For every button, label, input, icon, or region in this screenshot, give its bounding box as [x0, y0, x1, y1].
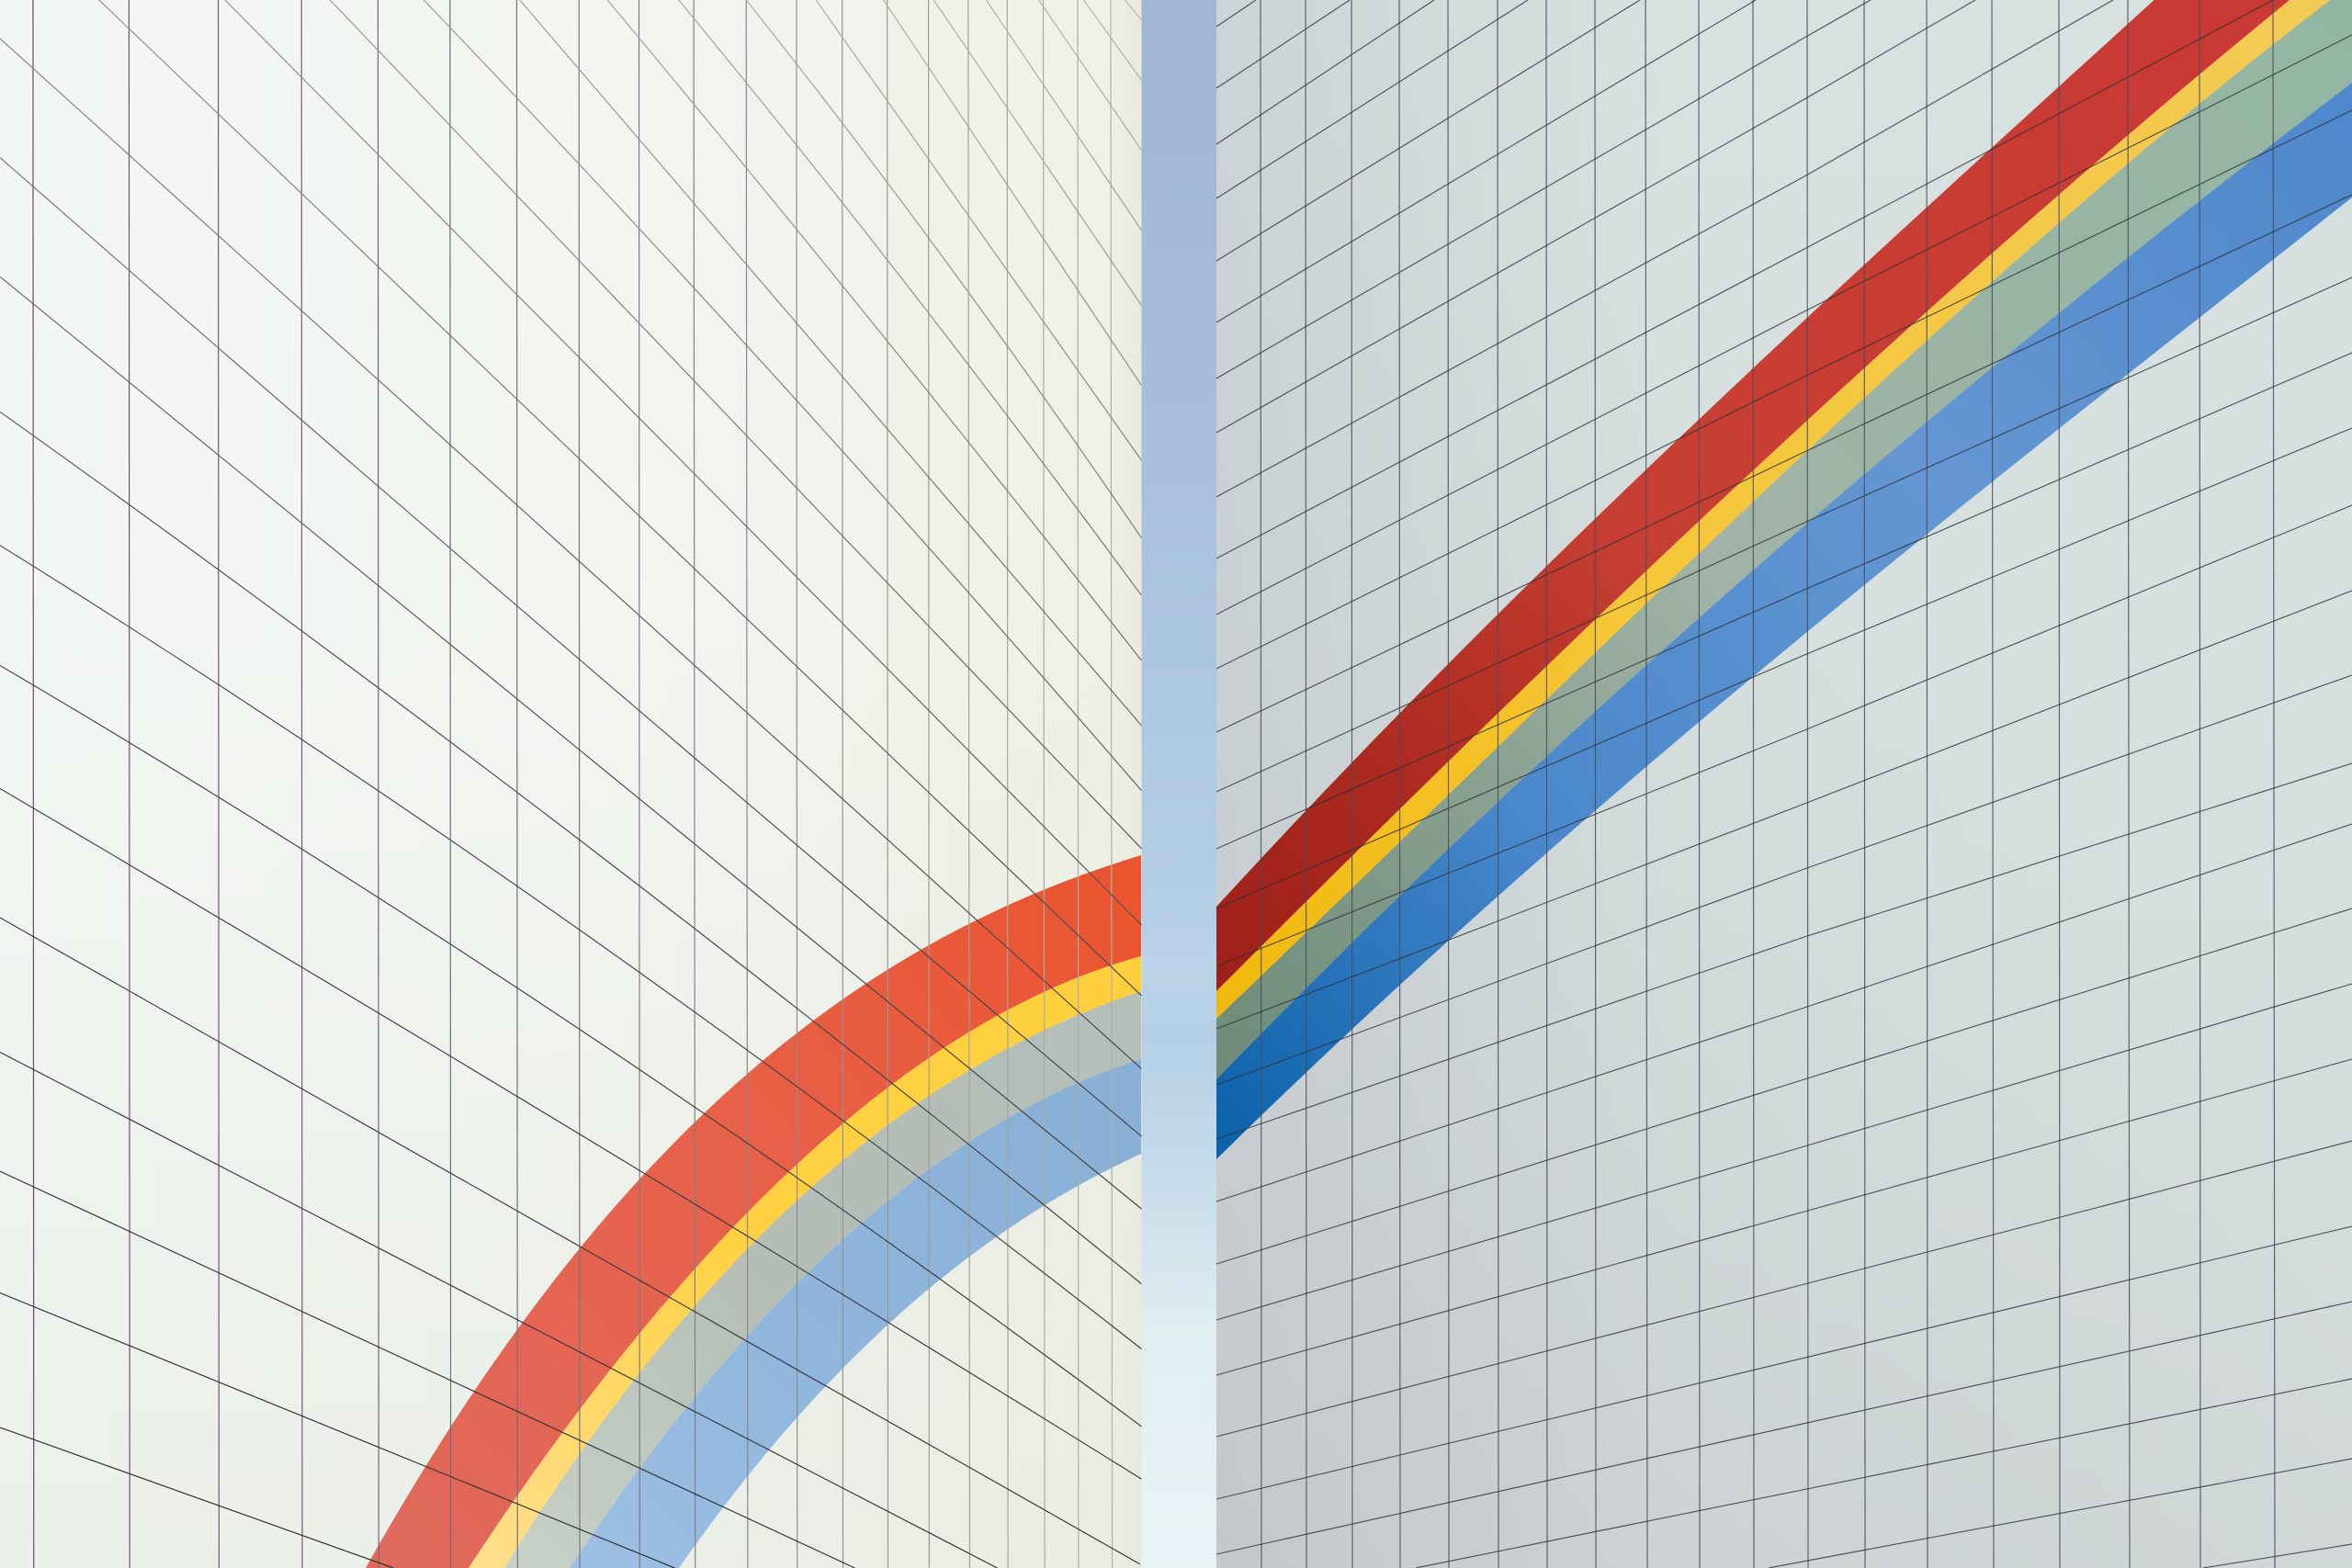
- right band: blue: [1216, 83, 2352, 1159]
- right wall slanted grid lines: [1216, 0, 2352, 1568]
- right band: red: [1216, 0, 2352, 991]
- left rainbow arc: [366, 855, 1141, 1568]
- right band: green: [1216, 0, 2352, 1079]
- left arc: grey-green band: [504, 991, 1141, 1568]
- left arc: yellow band: [469, 956, 1141, 1568]
- right wall: [1216, 0, 2352, 1568]
- left wall: [0, 0, 1141, 1568]
- right rainbow band: [1216, 0, 2352, 1159]
- left arc: red band: [366, 855, 1141, 1568]
- sky gap between the walls: [1139, 0, 1218, 1568]
- left wall diagonal grid lines: [0, 0, 1141, 1568]
- right wall vertical grid lines: [1261, 0, 2275, 1568]
- right band: yellow: [1216, 0, 2352, 1019]
- left arc: blue band: [570, 1059, 1141, 1568]
- left wall vertical grid lines: [33, 0, 1113, 1568]
